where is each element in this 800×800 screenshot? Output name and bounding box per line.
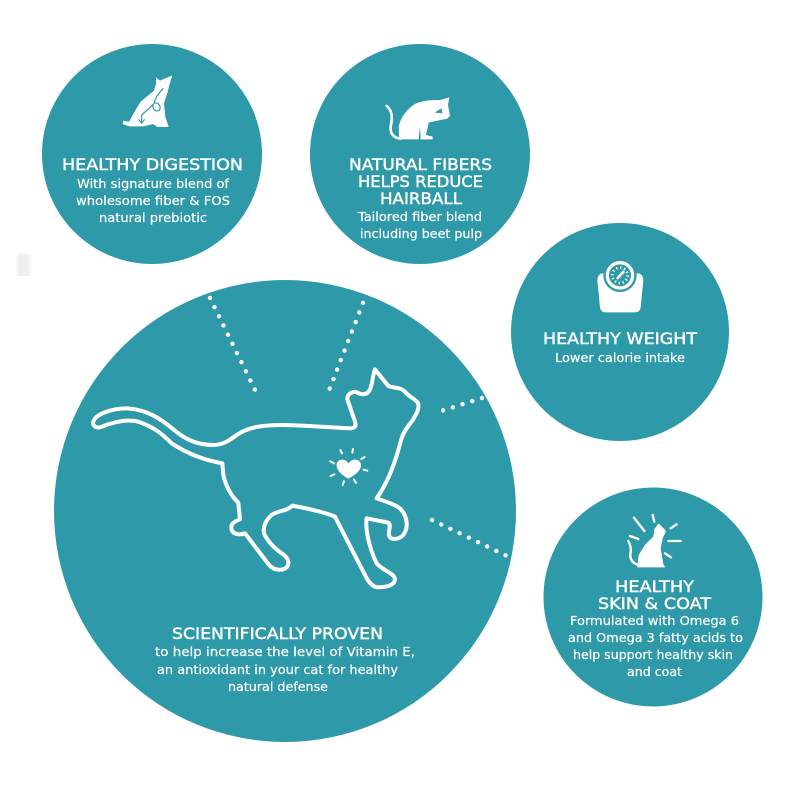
text block: and coat <box>627 664 682 679</box>
icon: weighing scale <box>597 259 643 312</box>
dotted connector lines <box>210 298 507 556</box>
icon: heart with rays <box>330 449 367 485</box>
text block: natural prebiotic <box>99 210 207 225</box>
heading: SKIN & COAT <box>598 594 711 613</box>
icon: cat outline <box>93 369 418 587</box>
icon: sitting cat with digestive tract <box>123 75 172 127</box>
text block: an antioxidant in your cat for healthy <box>157 662 399 677</box>
text block: natural defense <box>228 679 328 694</box>
panel: natural fibers <box>310 44 530 264</box>
text block: Lower calorie intake <box>555 350 685 365</box>
text block: Formulated with Omega 6 <box>570 613 739 628</box>
heading: HEALTHY DIGESTION <box>62 155 243 174</box>
panel: healthy weight <box>511 223 729 441</box>
text block: to help increase the level of Vitamin E, <box>155 644 415 659</box>
heading: HELPS REDUCE <box>358 172 483 191</box>
heading: HEALTHY WEIGHT <box>543 329 697 348</box>
heading <box>349 155 492 208</box>
text block <box>76 176 230 225</box>
heading: SCIENTIFICALLY PROVEN <box>172 624 383 643</box>
text block: wholesome fiber & FOS <box>76 193 230 208</box>
panel: healthy digestion <box>42 44 262 264</box>
text block: and Omega 3 fatty acids to <box>568 630 743 645</box>
text block: With signature blend of <box>77 176 230 191</box>
icon: cat with shine rays <box>628 515 681 567</box>
panel: scientifically proven <box>54 280 516 742</box>
text block <box>155 644 415 694</box>
text block <box>568 613 743 679</box>
heading <box>598 577 711 613</box>
text block: Tailored fiber blend <box>357 209 482 224</box>
icon: grooming cat <box>387 97 450 139</box>
heading: HEALTHY <box>615 577 694 596</box>
text block <box>357 209 482 241</box>
text block: help support healthy skin <box>573 647 733 662</box>
heading: NATURAL FIBERS <box>349 155 492 174</box>
heading: HAIRBALL <box>380 189 462 208</box>
text block: including beet pulp <box>360 226 482 241</box>
panel: healthy skin and coat <box>544 488 762 706</box>
